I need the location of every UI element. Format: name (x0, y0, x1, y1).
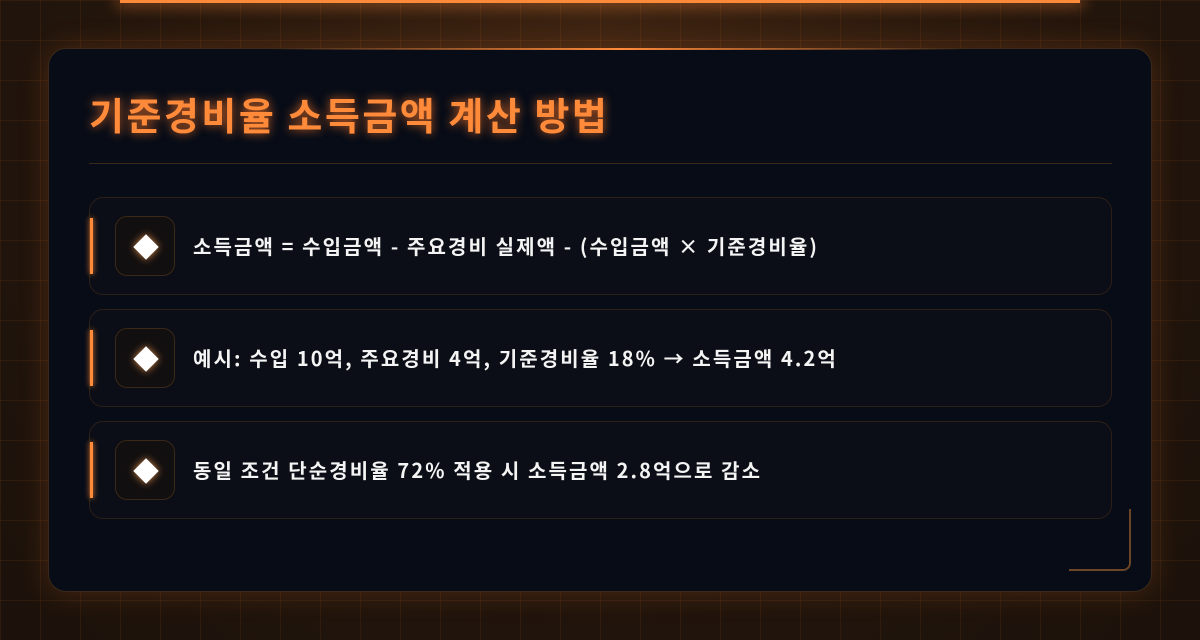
text: formula: 소득금액 = 수입금액 - 주요경비 실제액 - (수입금액 × 기준경비율) (193, 231, 819, 260)
text: comparison: 동일 조건 단순경비율 72% 적용 시 소득금액 2.8억으로 감소 (193, 455, 762, 484)
text: example: 예시: 수입 10억, 주요경비 4억, 기준경비율 18% → 소득금액 4.2억 (193, 343, 838, 372)
icon: diamond (115, 216, 175, 276)
item: example (89, 309, 1112, 407)
item: formula (89, 197, 1112, 295)
panel: main card (48, 48, 1152, 592)
icon: diamond (115, 440, 175, 500)
item: comparison (89, 421, 1112, 519)
title: 기준경비율 소득금액 계산 방법 (89, 86, 609, 141)
icon: diamond (115, 328, 175, 388)
